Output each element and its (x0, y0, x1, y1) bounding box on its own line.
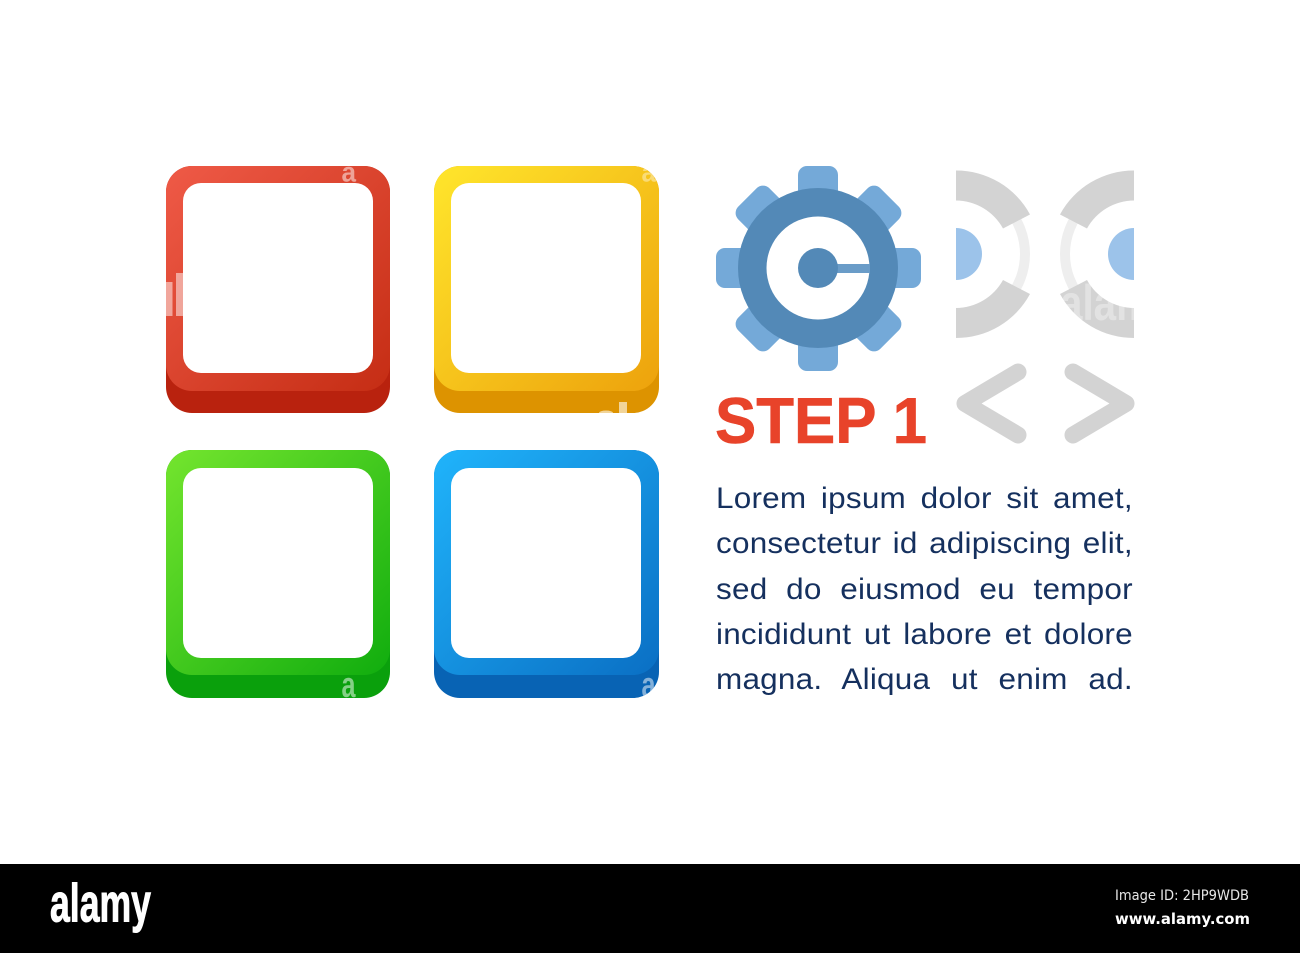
text block: body copy: incididunt ut labore et dolore (716, 618, 1133, 651)
panel: green rounded square (166, 450, 390, 705)
icon: right half gauge (1060, 170, 1134, 338)
text block: body copy: consectetur id adipiscing elit, (716, 527, 1133, 560)
footer bar (0, 864, 1300, 953)
panel: blue rounded square: a (642, 664, 656, 705)
panel: red rounded square: a (342, 156, 356, 188)
panel: blue rounded square (434, 450, 659, 705)
panel: red rounded square (166, 156, 390, 413)
panel: yellow rounded square: a (642, 156, 656, 188)
panel: green rounded square: a (342, 664, 356, 705)
logo: alamy: alamy (50, 874, 151, 934)
text block: body copy: magna. Aliqua ut enim ad. (716, 663, 1133, 696)
text block: body copy: Lorem ipsum dolor sit amet, (716, 482, 1133, 515)
icon: gear (716, 166, 921, 371)
icon: right half gauge: alam (1060, 275, 1152, 331)
panel: yellow rounded square (434, 156, 659, 416)
icon: left half gauge (956, 170, 1030, 338)
image id: Image ID: 2HP9WDB (1115, 888, 1249, 904)
heading: step 1: STEP 1 (715, 384, 927, 457)
icon: right chevron (1073, 372, 1126, 435)
text block: body copy: sed do eiusmod eu tempor (716, 573, 1133, 606)
icon: left chevron (965, 372, 1018, 435)
website: www.alamy.com (1115, 910, 1250, 928)
text block: body copy (716, 482, 1133, 696)
